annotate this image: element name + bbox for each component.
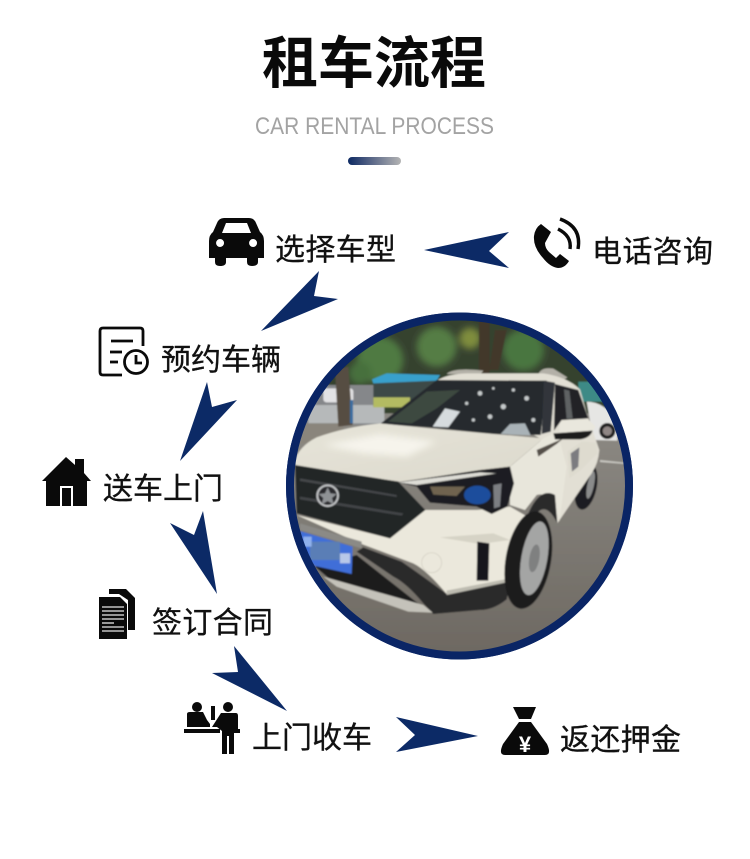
side mirror: [560, 420, 592, 432]
arrow: reserve to delivery: [180, 382, 237, 461]
label: 预约车辆: [161, 344, 281, 377]
lower bumper and skid: [315, 555, 420, 605]
grille: [295, 465, 425, 538]
roof and rails: [447, 370, 483, 375]
icon: documents: [99, 589, 135, 639]
step: delivery: [42, 457, 223, 506]
step: phone consultation: [534, 219, 713, 269]
icon: counter and people: [184, 702, 240, 754]
plate: [300, 531, 353, 574]
icon: schedule form: [100, 328, 148, 375]
side windows: [554, 384, 588, 431]
label: 选择车型: [275, 234, 396, 267]
icon: car: [209, 218, 264, 266]
arrow: model to reserve: [261, 271, 338, 331]
icon: money bag: [501, 707, 549, 757]
step: reserve: [100, 328, 281, 377]
label: 返还押金: [560, 724, 681, 757]
headlight: [398, 467, 514, 514]
windshield: [380, 380, 547, 435]
rear wheel: [574, 468, 598, 510]
label: 电话咨询: [592, 236, 713, 269]
wheel arch and front wheel: [528, 492, 558, 524]
label: 上门收车: [252, 722, 372, 755]
fender and door: [508, 440, 544, 511]
arrow: collection to refund: [396, 717, 478, 752]
title: 租车流程: [262, 32, 486, 95]
step: choose model: [209, 218, 396, 267]
arrow: phone to model: [424, 232, 509, 268]
step: deposit refund: [501, 707, 681, 757]
step: collection: [184, 702, 372, 755]
hood: [295, 423, 543, 482]
arrow: contract to collection: [212, 646, 287, 711]
arrow: delivery to contract: [170, 511, 217, 594]
icon: house: [42, 457, 91, 506]
label: 送车上门: [103, 473, 223, 506]
badge: [317, 485, 338, 506]
icon: phone: [534, 219, 579, 268]
photo: white SUV in navy ring: [280, 310, 640, 670]
bumper: [297, 507, 527, 594]
step: sign contract: [99, 589, 273, 640]
icon: money bag: ¥: [519, 732, 532, 757]
title accent bar: [348, 157, 401, 165]
subtitle: CAR RENTAL PROCESS: [255, 113, 494, 140]
label: 签订合同: [152, 607, 273, 640]
